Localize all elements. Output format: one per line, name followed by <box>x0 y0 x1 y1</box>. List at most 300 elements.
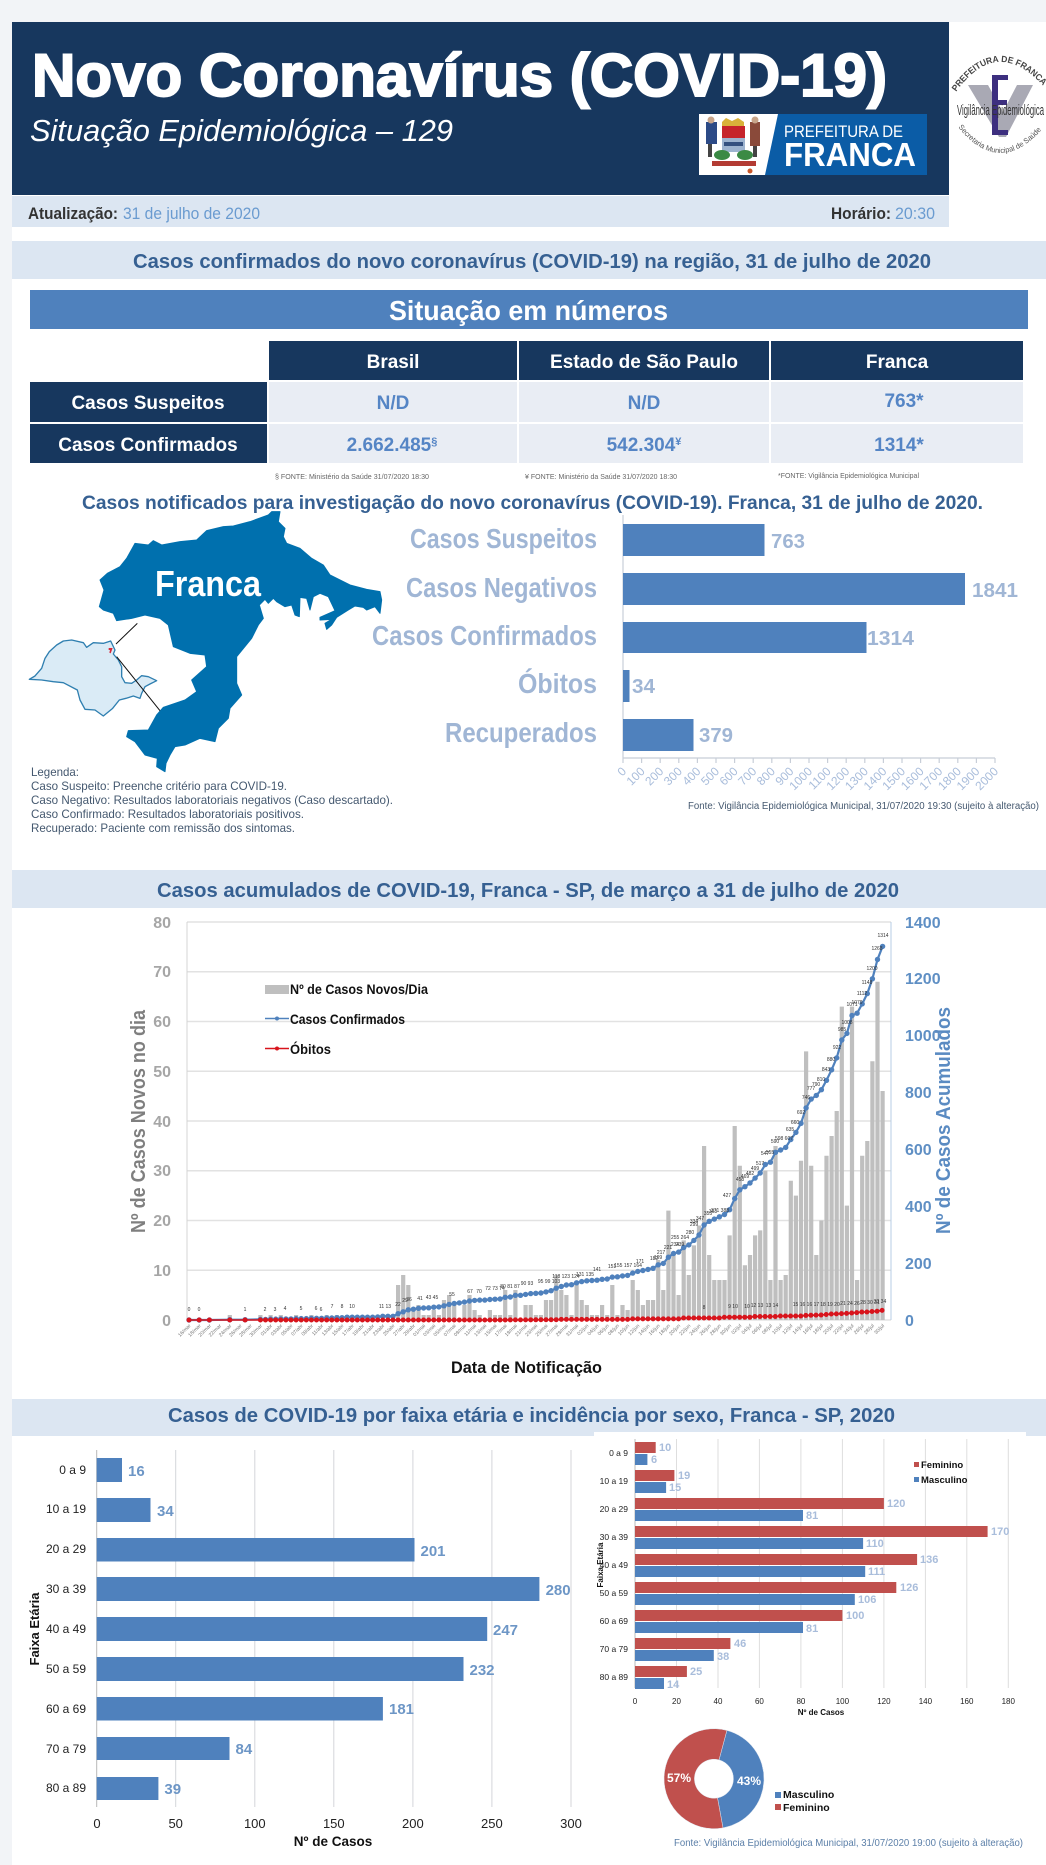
data labels: 922 <box>833 1045 841 1051</box>
bar chart: casos por sexo: 14 <box>667 1679 680 1691</box>
date axis labels: 23/mai <box>524 1323 539 1338</box>
x axis title: Data de Notificação <box>451 1358 602 1377</box>
logo: Prefeitura de Franca: PREFEITURA DE <box>784 123 903 141</box>
data labels: 7 <box>331 1304 334 1310</box>
data labels: 1112 <box>857 991 867 997</box>
right axis labels: 0 <box>905 1313 914 1330</box>
bar chart: casos por faixa etária: 16 <box>128 1463 145 1480</box>
update strip: 20:30 <box>895 205 935 223</box>
right axis labels: 400 <box>905 1199 932 1216</box>
bar chart: casos por faixa etária: 232 <box>470 1662 495 1679</box>
bar chart: casos por faixa etária: 250 <box>481 1816 503 1831</box>
data labels: 458 <box>736 1177 744 1183</box>
bar chart: casos notificados: 800 <box>754 764 778 788</box>
bar chart: casos notificados: 34 <box>632 676 656 698</box>
data labels: 0 <box>188 1307 191 1313</box>
date axis labels: 31/mai <box>565 1323 580 1338</box>
date axis labels: 20/jul <box>822 1323 835 1336</box>
data labels: 6 <box>320 1307 323 1313</box>
date axis labels: 08/jul <box>761 1323 774 1336</box>
data labels: 29 <box>402 1298 408 1304</box>
bar chart: casos por faixa etária: 30 a 39 <box>46 1582 86 1596</box>
table: situação em números: 2.662.485 <box>347 435 431 456</box>
bar chart: casos notificados: 0 <box>614 764 629 779</box>
data labels: 1079 <box>851 1000 863 1006</box>
bar chart: casos por sexo: 111 <box>868 1566 885 1578</box>
right axis labels: 1200 <box>905 971 941 988</box>
bar chart: casos por sexo: 140 <box>919 1697 933 1706</box>
bar chart: casos por faixa etária: 181 <box>389 1701 414 1718</box>
data labels: 555 <box>766 1150 774 1156</box>
data labels: 217 <box>657 1250 665 1256</box>
date axis labels: 05/abr <box>280 1323 295 1337</box>
data labels: 36 <box>406 1297 412 1303</box>
right axis labels: 600 <box>905 1142 932 1159</box>
bar chart: casos notificados: 1500 <box>879 764 908 793</box>
data labels: 0 <box>198 1307 201 1313</box>
data labels: 10 <box>744 1304 750 1310</box>
bar chart: casos por faixa etária: 50 a 59 <box>46 1662 86 1676</box>
section heading: faixa etária e sexo: Casos de COVID-19 por faixa etária e incidência por sexo, Franca - SP, 2020 <box>168 1404 895 1427</box>
data labels: 131 135 <box>576 1272 594 1278</box>
section heading: casos confirmados <box>12 241 1046 279</box>
data labels: 239 <box>676 1242 684 1248</box>
bar chart: casos notificados: 1900 <box>954 764 983 793</box>
logo: Vigilância Epidemiológica <box>952 56 1046 154</box>
date axis labels: 04/jul <box>741 1323 753 1336</box>
date axis labels: 21/mai <box>514 1323 529 1338</box>
data labels: 43 45 <box>426 1295 438 1301</box>
table footnotes <box>275 471 919 481</box>
data labels: 28 30 31 <box>860 1300 880 1306</box>
right axis labels: 200 <box>905 1256 932 1273</box>
legend: sexo: Feminino <box>921 1460 963 1471</box>
bar chart: casos por sexo: 0 a 9 <box>609 1448 628 1458</box>
data labels: 1071 <box>846 1002 858 1008</box>
bar chart: casos por faixa etária: 84 <box>236 1741 253 1758</box>
left axis labels: 60 <box>153 1014 171 1031</box>
donut chart: sexo: 43% <box>737 1774 761 1788</box>
bar chart: casos por sexo: 10 a 19 <box>600 1476 628 1486</box>
table: situação em números: N/D <box>628 393 660 414</box>
date axis labels: 07/abr <box>290 1323 305 1337</box>
date axis labels: 28/mar <box>238 1323 254 1338</box>
update strip: Atualização: <box>28 205 118 223</box>
bar chart: casos por sexo <box>596 1439 1016 1717</box>
date axis labels: 24/jul <box>843 1323 855 1336</box>
data labels: 880 <box>827 1057 835 1063</box>
deaths line <box>189 1310 883 1320</box>
bar chart: casos por sexo: 50 a 59 <box>600 1588 628 1598</box>
bar chart: casos por sexo: 170 <box>991 1526 1009 1538</box>
date axis labels: 28/jun <box>709 1323 723 1337</box>
bar chart: casos por faixa etária: 0 <box>93 1816 101 1831</box>
bar chart: casos por faixa etária: 0 a 9 <box>59 1463 86 1477</box>
data labels: 12 13 <box>751 1303 763 1309</box>
bar chart: casos notificados: 1314 <box>867 628 915 650</box>
data labels: 5 <box>300 1306 303 1312</box>
map legend <box>31 765 393 835</box>
bar chart: casos por sexo: 25 <box>690 1666 702 1678</box>
data labels: 355 <box>704 1211 712 1217</box>
date axis labels: 26/jul <box>853 1323 866 1336</box>
data labels: 1148 <box>862 980 873 986</box>
bar chart: casos notificados: 300 <box>661 764 685 788</box>
date axis labels: 20/mar <box>198 1323 213 1338</box>
bar chart: casos por sexo: 0 <box>633 1697 638 1706</box>
left axis labels: 20 <box>153 1213 171 1230</box>
date axis labels: 26/jun <box>699 1323 713 1337</box>
bar chart: casos por sexo: 106 <box>858 1594 876 1606</box>
table: situação em números: N/D <box>377 393 409 414</box>
date axis labels: 07/mai <box>443 1323 458 1338</box>
donut chart: sexo <box>664 1729 834 1829</box>
table footnotes: § FONTE: Ministério da Saúde 31/07/2020 18:30 <box>275 472 429 481</box>
data labels: 517 <box>756 1161 764 1167</box>
data labels: 221 <box>664 1245 672 1251</box>
data labels: 9 10 <box>728 1304 738 1310</box>
data labels: 151 <box>608 1264 616 1270</box>
date axis labels: 06/jun <box>597 1323 611 1337</box>
bar chart: casos por faixa etária: 60 a 69 <box>46 1702 86 1716</box>
date axis labels: 22/mar <box>208 1323 223 1338</box>
date axis labels: 17/abr <box>341 1323 356 1337</box>
data labels: 1 <box>244 1307 247 1313</box>
data labels: 72 73 74 <box>485 1286 505 1292</box>
bar chart: casos notificados: 700 <box>735 764 760 788</box>
legend: sexo: Masculino <box>921 1475 968 1486</box>
chart legend: Nº de Casos Novos/Dia <box>290 981 428 997</box>
date axis labels: 27/abr <box>392 1323 407 1337</box>
date axis labels: 02/jul <box>731 1323 743 1336</box>
section heading: casos acumulados: Casos acumulados de COVID-19, Franca - SP, de março a 31 de julho de 2020 <box>157 879 899 902</box>
bar chart: casos por faixa etária: 20 a 29 <box>46 1542 86 1556</box>
data labels: 67 <box>467 1289 473 1295</box>
bar chart: casos por sexo: Faixa Etária <box>596 1542 605 1587</box>
legend: donut: Feminino <box>783 1802 830 1814</box>
title: Novo Coronavírus (COVID-19) <box>32 42 887 109</box>
bar chart: casos notificados: 900 <box>772 764 797 788</box>
bar chart: casos por faixa etária: 150 <box>323 1816 345 1831</box>
data labels: 777 <box>807 1086 815 1092</box>
date axis labels: 08/jun <box>607 1323 621 1337</box>
date axis labels: 16/jul <box>802 1323 815 1336</box>
logo: Vigilância Epidemiológica: Secretaria Municipal de Saúde <box>959 124 1041 154</box>
data labels: 547 <box>761 1151 769 1157</box>
data labels: 6 <box>315 1306 318 1312</box>
bar chart: casos por faixa etária: 40 a 49 <box>46 1622 86 1636</box>
data labels: 810 <box>817 1077 825 1083</box>
date axis labels: 29/abr <box>403 1323 417 1337</box>
bar chart: casos por faixa etária: 80 a 89 <box>46 1781 86 1795</box>
bar chart: casos notificados: 400 <box>679 764 704 788</box>
data labels: 182 <box>650 1256 658 1262</box>
bar chart: casos por sexo: 60 a 69 <box>600 1616 628 1626</box>
date axis labels: 02/jun <box>576 1323 590 1337</box>
bar chart: casos notificados: 1100 <box>806 764 834 792</box>
bar chart: casos por sexo: 46 <box>734 1638 746 1650</box>
date axis labels <box>177 1323 886 1338</box>
data labels: 141 <box>593 1267 601 1273</box>
date axis labels: 29/mai <box>555 1323 570 1338</box>
data labels: 985 <box>838 1027 846 1033</box>
bar chart: casos por sexo: 120 <box>887 1498 905 1510</box>
data labels: 371 388 <box>711 1208 729 1214</box>
bar chart: casos por faixa etária: 70 a 79 <box>46 1742 86 1756</box>
section heading: faixa etária e sexo <box>12 1399 1046 1436</box>
left axis title: Nº de Casos Novos no dia <box>128 1009 150 1233</box>
table: situação em números: § <box>431 436 437 448</box>
bar chart: casos notificados: 100 <box>624 764 648 788</box>
bar chart: casos por sexo: 60 <box>755 1697 764 1706</box>
date axis labels: 13/abr <box>321 1323 335 1337</box>
bar chart: casos por faixa etária: Faixa Etária <box>27 1592 42 1666</box>
data labels: 11 13 <box>379 1304 391 1310</box>
data labels: 18 19 20 <box>820 1302 840 1308</box>
bar chart: casos por sexo: 80 a 89 <box>600 1672 628 1682</box>
date axis labels: 01/abr <box>260 1323 274 1337</box>
date axis labels: 18/jul <box>812 1323 825 1336</box>
date axis labels: 13/mai <box>473 1323 488 1338</box>
data labels: 1200 <box>866 966 878 972</box>
table: situação em números: 542.304 <box>607 435 675 456</box>
date axis labels: 12/jun <box>627 1323 641 1337</box>
date axis labels: 15/abr <box>331 1323 346 1337</box>
bar chart: casos por faixa etária: 34 <box>157 1503 174 1520</box>
bar chart: casos por sexo: 126 <box>900 1582 918 1594</box>
date axis labels: 22/jul <box>833 1323 845 1336</box>
data labels: 590 <box>771 1139 779 1145</box>
bar chart: casos por faixa etária: Nº de Casos <box>294 1834 372 1849</box>
right axis labels: 800 <box>905 1085 932 1102</box>
date axis labels: 27/mai <box>545 1323 560 1338</box>
data labels: 8 <box>703 1305 706 1311</box>
date axis labels: 01/mai <box>412 1323 427 1338</box>
bar chart: casos notificados: Casos Negativos <box>406 572 597 603</box>
map legend: Legenda: <box>31 765 79 779</box>
section heading: casos notificados: Casos notificados para investigação do novo coronavírus (COVID-19). Franca, 31 de julho de 2020. <box>82 492 983 514</box>
bar chart: casos notificados: Recuperados <box>445 717 597 748</box>
date axis labels: 30/jul <box>873 1323 886 1336</box>
bar chart: casos por sexo: 40 a 49 <box>600 1560 628 1570</box>
bar chart: casos notificados <box>372 515 1039 812</box>
bar chart: casos notificados: 379 <box>699 725 733 747</box>
date axis labels: 18/mar <box>187 1323 203 1338</box>
map legend: Caso Negativo: Resultados laboratoriais negativos (Caso descartado). <box>31 793 393 807</box>
left axis labels: 70 <box>153 964 171 981</box>
bar chart: casos por sexo: 30 a 39 <box>600 1532 628 1542</box>
bar chart: casos notificados: 1400 <box>861 764 890 793</box>
date axis labels: 28/jul <box>863 1323 876 1336</box>
data labels: 469 <box>741 1174 749 1180</box>
bar chart: casos notificados: 200 <box>642 764 667 788</box>
bar chart: casos por faixa etária: 39 <box>164 1781 181 1798</box>
map legend: Caso Suspeito: Preenche critério para COVID-19. <box>31 779 287 793</box>
bar chart: casos por sexo: 81 <box>806 1510 818 1522</box>
update strip: Horário: <box>831 205 891 223</box>
data labels: 80 81 87 <box>500 1284 520 1290</box>
bar chart: casos por sexo: 160 <box>960 1697 974 1706</box>
date axis labels: 05/mai <box>433 1323 447 1338</box>
table: situação em números: ¥ <box>675 436 682 448</box>
bar chart: casos por faixa etária: 300 <box>560 1816 582 1831</box>
left axis labels: 0 <box>162 1313 171 1330</box>
bar chart: casos por sexo: 20 <box>672 1697 681 1706</box>
bar chart: casos por sexo: 120 <box>877 1697 891 1706</box>
date axis labels: 19/mai <box>504 1323 519 1338</box>
table: situação em números: Brasil <box>367 352 419 373</box>
table: situação em números: Estado de São Paulo <box>550 352 738 373</box>
bar chart: casos notificados: 1300 <box>842 764 871 793</box>
date axis labels: 24/jun <box>689 1323 703 1337</box>
section heading: casos confirmados: Casos confirmados do novo coronavírus (COVID-19) na região, 31 de julho de 2020 <box>133 250 931 273</box>
table: situação em números <box>30 341 1023 463</box>
left axis labels: 50 <box>153 1064 171 1081</box>
legend: sexo <box>914 1460 968 1486</box>
data labels: 33 34 <box>874 1299 886 1305</box>
bar chart: casos por faixa etária: 200 <box>402 1816 424 1831</box>
bar chart: casos notificados: 600 <box>717 764 741 788</box>
combo chart: casos novos e acumulados <box>128 915 955 1377</box>
data labels: 499 <box>751 1166 759 1172</box>
legend: donut: Masculino <box>783 1789 834 1801</box>
data labels: 1008 <box>841 1020 853 1026</box>
data labels: 155 157 164 <box>614 1263 642 1269</box>
table footnotes: ¥ FONTE: Ministério da Saúde 31/07/2020 18:30 <box>525 472 677 481</box>
data labels: 171 <box>636 1259 644 1265</box>
bar chart: casos por sexo: 100 <box>846 1610 864 1622</box>
bar chart: casos por sexo: 40 <box>714 1697 723 1706</box>
left axis labels: 30 <box>153 1163 171 1180</box>
date axis labels: 25/mai <box>535 1323 549 1338</box>
data labels: 21 24 26 <box>840 1301 860 1307</box>
bar chart: casos por sexo: 6 <box>651 1454 657 1466</box>
right axis labels: 1400 <box>905 915 941 932</box>
right axis labels <box>905 915 941 1330</box>
data labels: 13 14 <box>766 1303 778 1309</box>
right axis title: Nº de Casos Acumulados <box>933 1007 955 1234</box>
date axis labels: 14/jul <box>792 1323 804 1336</box>
bar chart: casos notificados: Óbitos <box>518 668 597 699</box>
data labels: 843 <box>822 1067 830 1073</box>
data labels: 95 99 103 <box>538 1279 560 1285</box>
date axis labels: 04/jun <box>587 1323 601 1337</box>
data labels: 635 <box>786 1127 794 1133</box>
bar chart: casos por sexo: 180 <box>1002 1697 1016 1706</box>
data labels <box>188 933 889 1313</box>
data labels: 3 <box>274 1307 277 1313</box>
left axis labels <box>153 915 171 1330</box>
data labels: 280 <box>686 1230 694 1236</box>
bar chart: casos notificados: 1700 <box>917 764 946 793</box>
bar chart: casos notificados: 2000 <box>972 764 1001 793</box>
chart legend <box>265 981 428 1057</box>
date axis labels: 15/mai <box>484 1323 498 1338</box>
date axis labels: 30/jun <box>719 1323 733 1337</box>
confirmed cases line <box>189 946 883 1320</box>
data labels: 4 <box>284 1306 287 1312</box>
map legend: Caso Confirmado: Resultados laboratoriais positivos. <box>31 807 304 821</box>
chart legend: Óbitos <box>290 1040 331 1057</box>
legend: donut <box>775 1789 834 1814</box>
bar chart: casos notificados: 763 <box>771 531 805 553</box>
bar chart: casos por faixa etária: 50 <box>168 1816 183 1831</box>
bar chart: casos por sexo: 19 <box>678 1470 690 1482</box>
date axis labels: 16/mar <box>177 1323 193 1338</box>
date axis labels: 09/abr <box>301 1323 315 1337</box>
bar chart: casos notificados: 1800 <box>935 764 964 793</box>
left axis labels: 80 <box>153 915 171 932</box>
date axis labels: 18/jun <box>658 1323 672 1337</box>
date axis labels: 14/jun <box>638 1323 652 1337</box>
data labels: 70 <box>476 1289 482 1295</box>
data labels: 8 <box>341 1304 344 1310</box>
date axis labels: 11/mai <box>463 1323 478 1338</box>
date axis labels: 22/jun <box>678 1323 692 1337</box>
data labels: 363 <box>709 1209 717 1215</box>
map legend: Recuperado: Paciente com remissão dos sintomas. <box>31 821 295 835</box>
date axis labels: 25/abr <box>382 1323 397 1337</box>
bar chart: casos notificados: Casos Confirmados <box>372 620 597 651</box>
right axis labels: 1000 <box>905 1028 941 1045</box>
date axis labels: 12/jul <box>782 1323 794 1336</box>
data labels: 1314 <box>877 933 889 939</box>
data labels: 746 <box>802 1095 810 1101</box>
table: situação em números: 1314* <box>874 435 924 456</box>
bar chart: casos por faixa etária <box>27 1450 582 1849</box>
data labels: 660 <box>791 1120 799 1126</box>
bar chart: casos por sexo: Nº de Casos <box>798 1708 845 1717</box>
source note: bottom: Fonte: Vigilância Epidemiológica Municipal, 31/07/2020 19:00 (sujeito à alteração) <box>674 1837 1023 1849</box>
data labels: 692 <box>797 1110 805 1116</box>
bar chart: casos por sexo: 110 <box>866 1538 884 1550</box>
bar chart: casos notificados: 1600 <box>898 764 927 793</box>
date axis labels: 10/jul <box>771 1323 784 1336</box>
data labels: 55 <box>449 1292 455 1298</box>
bar chart: casos notificados: 1841 <box>972 580 1018 602</box>
table footnotes: *FONTE: Vigilância Epidemiológica Municipal <box>778 471 919 480</box>
bar chart: casos por sexo: 80 <box>796 1697 806 1706</box>
data labels: 427 <box>723 1193 731 1199</box>
date axis labels: 06/jul <box>751 1323 764 1336</box>
data labels: 90 93 <box>521 1281 533 1287</box>
table: situação em números: Casos Confirmados <box>58 435 238 456</box>
bar chart: casos notificados: 500 <box>698 764 722 788</box>
data labels: 2 <box>264 1307 267 1313</box>
subtitle: Situação Epidemiológica – 129 <box>30 113 453 148</box>
update strip <box>12 196 949 227</box>
data labels: 118 123 124 <box>552 1274 580 1280</box>
data labels: 482 <box>746 1171 754 1177</box>
header panel <box>12 22 949 195</box>
logo: Prefeitura de Franca <box>699 114 927 175</box>
bar chart: casos por sexo: 38 <box>717 1651 729 1663</box>
data labels: 1268 <box>871 946 883 952</box>
data labels: 22 <box>395 1302 401 1308</box>
date axis labels: 23/abr <box>372 1323 386 1337</box>
data labels: 41 <box>417 1296 423 1302</box>
daily new cases bars <box>230 982 883 1320</box>
left axis labels: 40 <box>153 1114 171 1131</box>
data labels: 199 <box>654 1255 662 1261</box>
donut chart: sexo: 57% <box>667 1771 691 1785</box>
bar chart: casos por sexo: 136 <box>920 1554 938 1566</box>
data labels: 598 607 <box>775 1136 793 1142</box>
bar chart: casos por faixa etária: 100 <box>244 1816 266 1831</box>
date axis labels: 20/jun <box>668 1323 682 1337</box>
data labels: 790 <box>812 1082 820 1088</box>
banner: Situação em números: Situação em números <box>389 295 668 326</box>
